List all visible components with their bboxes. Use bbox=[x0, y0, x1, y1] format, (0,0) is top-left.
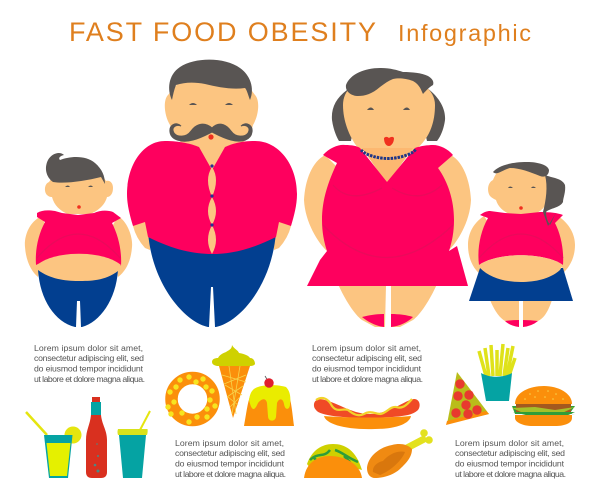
text block 4: ut labore et dolore magna aliqua. bbox=[455, 469, 566, 479]
mother legs bbox=[338, 284, 437, 327]
daughter arms bbox=[468, 216, 575, 273]
son shirt bbox=[36, 210, 121, 266]
icon: pizza slice bbox=[446, 372, 489, 425]
icon: taco bbox=[304, 444, 362, 478]
father mouth bbox=[208, 134, 214, 140]
daughter shirt bbox=[478, 211, 563, 265]
father placket bbox=[208, 167, 216, 254]
son head bbox=[45, 172, 113, 214]
icon: chicken leg bbox=[367, 429, 433, 478]
son belly bbox=[37, 254, 121, 281]
figure: mother bbox=[304, 68, 471, 327]
son pants bbox=[38, 270, 118, 327]
daughter legs bbox=[490, 300, 552, 327]
father moustache bbox=[170, 124, 252, 141]
text block 4: consectetur adipiscing elit, sed bbox=[455, 448, 565, 458]
mother dress bbox=[307, 145, 468, 286]
mother neck bbox=[362, 148, 413, 184]
daughter head bbox=[488, 168, 549, 214]
daughter eyes bbox=[508, 186, 536, 188]
mother fringe bbox=[346, 68, 433, 96]
icon: soda cup bbox=[118, 411, 150, 478]
son hair bbox=[46, 153, 105, 184]
text block 1: ut labore et dolore magna aliqua. bbox=[34, 374, 145, 384]
text block 3: ut labore et dolore magna aliqua. bbox=[312, 374, 423, 384]
mother socks bbox=[362, 314, 413, 327]
title bbox=[69, 17, 531, 47]
icon: donut bbox=[165, 374, 218, 425]
text block 1 bbox=[34, 343, 145, 384]
mother back hair bbox=[332, 88, 445, 141]
father hair bbox=[169, 60, 252, 100]
figure: son bbox=[25, 153, 132, 327]
text block 1: consectetur adipiscing elit, sed bbox=[34, 353, 144, 363]
father eyes bbox=[189, 103, 233, 105]
son arms bbox=[25, 216, 132, 277]
icon: pudding with cherry bbox=[244, 376, 294, 426]
text block 3 bbox=[312, 343, 423, 384]
son shirt fold bbox=[37, 234, 120, 258]
daughter skirt bbox=[469, 268, 573, 301]
text block 2: ut labore et dolore magna aliqua. bbox=[175, 469, 286, 479]
daughter fringe bbox=[493, 162, 549, 177]
text block 4 bbox=[455, 438, 566, 479]
daughter shirt fold bbox=[479, 234, 563, 258]
title: FAST FOOD OBESITY bbox=[69, 17, 376, 47]
text block 1: Lorem ipsum dolor sit amet, bbox=[34, 343, 143, 353]
icon: ice cream cone bbox=[212, 345, 255, 418]
text block 1: do eiusmod tempor incididunt bbox=[34, 364, 144, 374]
daughter back hair bbox=[543, 175, 565, 226]
daughter mouth bbox=[519, 206, 523, 210]
daughter socks bbox=[505, 320, 538, 327]
mother head bbox=[343, 76, 435, 158]
icon: french fries bbox=[479, 344, 515, 401]
icon: burger bbox=[512, 386, 575, 426]
title: Infographic bbox=[398, 20, 531, 46]
son mouth bbox=[77, 205, 81, 209]
text block 2: Lorem ipsum dolor sit amet, bbox=[175, 438, 284, 448]
icon: lemonade glass bbox=[26, 412, 82, 478]
text block 2 bbox=[175, 438, 286, 479]
mother necklace bbox=[361, 149, 416, 158]
icon: hot dog bbox=[314, 398, 420, 429]
figure: daughter bbox=[468, 162, 575, 327]
father pants bbox=[148, 232, 276, 327]
text block 4: do eiusmod tempor incididunt bbox=[455, 458, 565, 468]
daughter belly bbox=[479, 255, 563, 282]
mother arms bbox=[304, 155, 471, 251]
text block 3: Lorem ipsum dolor sit amet, bbox=[312, 343, 421, 353]
father arms bbox=[133, 215, 291, 250]
figure: father bbox=[127, 60, 297, 327]
son eyes bbox=[65, 186, 93, 187]
text block 3: do eiusmod tempor incididunt bbox=[312, 364, 422, 374]
mother eyes bbox=[367, 108, 410, 110]
father shirt bbox=[127, 141, 297, 254]
text block 3: consectetur adipiscing elit, sed bbox=[312, 353, 422, 363]
text block 2: do eiusmod tempor incididunt bbox=[175, 458, 285, 468]
text block 2: consectetur adipiscing elit, sed bbox=[175, 448, 285, 458]
father head bbox=[165, 75, 258, 172]
mother dress folds bbox=[323, 185, 453, 258]
mother mouth bbox=[384, 137, 394, 146]
text block 4: Lorem ipsum dolor sit amet, bbox=[455, 438, 564, 448]
icon: soda bottle bbox=[86, 397, 107, 478]
